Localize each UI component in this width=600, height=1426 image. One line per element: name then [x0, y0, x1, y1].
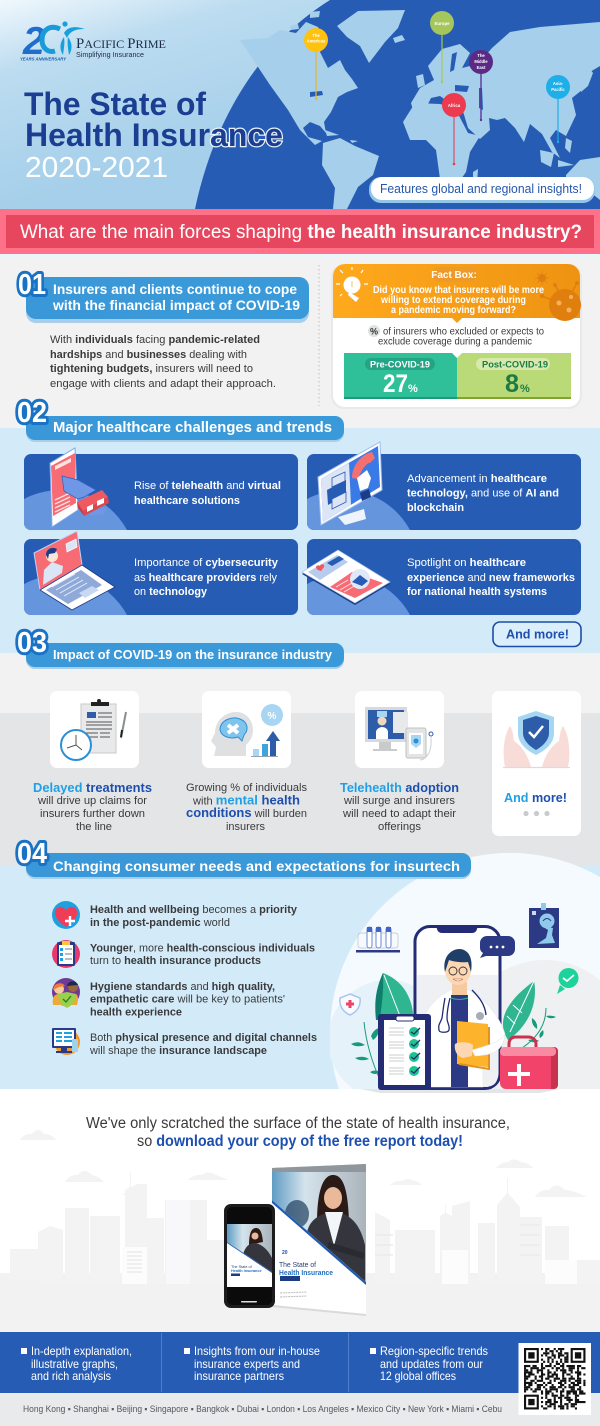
pin: The Middle East: Middle: [474, 59, 488, 64]
benefit: in-depth: In-depth explanation,: [31, 1344, 132, 1358]
benefit: in-depth: illustrative graphs,: [31, 1357, 118, 1371]
fact box: [331, 264, 582, 409]
icon: heart: [52, 901, 80, 929]
icon: head, brain and growth chart: [211, 704, 283, 756]
section 02 heading: 02: [17, 397, 47, 429]
call to action text: [86, 1115, 510, 1150]
section 01 body text: hardships and businesses dealing with: [50, 349, 247, 361]
stat: post-COVID-19 8%: [452, 353, 571, 399]
report cover: [272, 1164, 366, 1316]
list item: physical and digital: [52, 1028, 317, 1057]
left leaves: [351, 973, 413, 1080]
impact card: and more: And more!: [504, 790, 567, 805]
icon: head, brain and growth chart: %: [268, 711, 277, 722]
section 04 heading: [17, 838, 471, 879]
title: [24, 86, 283, 184]
section 03 heading: Impact of COVID-19 on the insurance industry: [53, 647, 333, 662]
check badge: [557, 968, 578, 994]
fact box: Did you know that insurers will be more: [373, 285, 544, 296]
map ocean globe: [195, 0, 600, 209]
icon: tablet: [302, 550, 390, 605]
card: telehealth: [24, 447, 298, 530]
icon: doctor on monitor with tablet: [365, 707, 433, 760]
card: healthcare technology: technology, and use of AI and: [407, 488, 559, 500]
list item: health and wellbeing: [52, 901, 298, 929]
benefit: in-depth: [21, 1344, 132, 1383]
stat: post-COVID-19 8%: %: [520, 383, 530, 395]
section 01 body text: tightening budgets, insurers will need to: [50, 363, 253, 375]
card: telehealth: Rise of telehealth and virtual: [134, 480, 281, 492]
impact card: delayed treatments: Delayed treatments: [33, 780, 152, 795]
callout: global and regional insights: [369, 177, 595, 203]
impact card: telehealth adoption: will surge and insurers: [343, 795, 456, 807]
title: The State of: [24, 86, 206, 122]
section 01 heading: [18, 269, 309, 323]
impact card: mental health: conditions will burden: [186, 805, 307, 820]
list item: hygiene standards: health experience: [90, 1006, 182, 1018]
office cities strip: Hong Kong ▪ Shanghai ▪ Beijing ▪ Singapore ▪ Bangkok ▪ Dubai ▪ London ▪ Los Angeles ▪ Mexico City ▪ New York ▪ Miami ▪ Cebu: [23, 1404, 502, 1414]
pin: The Middle East: [469, 50, 493, 121]
pin: Asia-Pacific: Asia-: [553, 81, 564, 86]
logo: Pacific Prime 20 years: Simplifying Insurance: [76, 50, 144, 59]
test tubes: [356, 927, 400, 952]
pin: Europe: Europe: [434, 21, 450, 26]
stat: post-COVID-19 8%: 8: [505, 370, 519, 398]
benefit: insights: [184, 1344, 320, 1383]
pin: Europe: [430, 11, 454, 83]
section 03 heading: 03: [17, 627, 47, 659]
fact box: %: [370, 326, 378, 336]
impact card: mental health: [186, 691, 307, 833]
benefit: regional: 12 global offices: [380, 1369, 456, 1383]
header panel: world map: [0, 0, 600, 209]
list item: hygiene standards: Hygiene standards and high quality,: [90, 981, 275, 993]
icon: phone with hand: [50, 448, 109, 527]
callout: global and regional insights: Features global and regional insights!: [380, 182, 582, 196]
impact card: delayed treatments: [33, 691, 152, 833]
phone mockup: Health Insurance: [231, 1269, 262, 1273]
impact card: telehealth adoption: [340, 691, 459, 833]
fact box: of insurers who excluded or expects to: [383, 326, 544, 338]
icon: light bulb: [336, 267, 368, 302]
report cover: The State of: [279, 1262, 316, 1269]
logo: Pacific Prime 20 years: 2: [22, 20, 45, 63]
list item: younger individuals: turn to health insurance products: [90, 955, 261, 967]
list item: younger individuals: Younger, more health-conscious individuals: [90, 942, 315, 954]
impact card: telehealth adoption: Telehealth adoption: [340, 780, 459, 795]
card: cybersecurity: on technology: [134, 586, 208, 598]
pin: The Americas: The: [312, 33, 320, 38]
section 04 heading: Changing consumer needs and expectations for insurtech: [53, 858, 460, 874]
card: healthcare technology: blockchain: [407, 502, 464, 514]
stat: pre-COVID-19 27%: 27: [383, 370, 408, 398]
icon: laptop: [34, 531, 115, 610]
x-ray card: [529, 903, 559, 948]
pin: Asia-Pacific: [546, 75, 570, 143]
shield badge: [340, 994, 360, 1015]
icon: shield and hands: [503, 711, 570, 768]
report cover: Health Insurance: [279, 1270, 333, 1277]
list item: hygiene standards: empathetic care will be key to patients': [90, 994, 285, 1006]
logo: Pacific Prime 20 years: YEARS ANNIVERSARY: [20, 56, 67, 62]
pin: The Americas: [304, 28, 328, 100]
right leaves: [503, 981, 556, 1048]
card: cybersecurity: Importance of cybersecurity: [134, 557, 279, 569]
section 02 heading: [17, 397, 344, 442]
impact card: and more: [492, 691, 581, 836]
skyline background: [0, 1130, 600, 1332]
impact card: delayed treatments: the line: [76, 821, 112, 833]
phone mockup: The State of: [231, 1265, 253, 1269]
benefit: regional: [370, 1344, 488, 1383]
icon: clipboard and clock: [61, 699, 126, 760]
call to action text: so download your copy of the free report today!: [137, 1133, 463, 1150]
report cover: 20: [282, 1250, 288, 1256]
stat: pre-COVID-19 27%: [344, 353, 457, 399]
banner: main question: What are the main forces shaping the health insurance industry?: [20, 222, 582, 243]
speech bubble: [480, 936, 515, 958]
icon: virus: [535, 271, 581, 321]
section 01 body text: engage with clients and adapt their approach.: [50, 378, 276, 390]
section 01: [18, 264, 582, 409]
impact card: telehealth adoption: will need to adapt their: [342, 808, 456, 820]
title: Health Insurance: [25, 117, 283, 153]
pin: Asia-Pacific: Pacific: [551, 87, 565, 92]
list item: health and wellbeing: Health and wellbeing becomes a priority: [90, 904, 298, 916]
benefits band: [0, 1332, 600, 1393]
card: healthcare experience: for national health systems: [407, 586, 547, 598]
pin: Africa: Africa: [448, 103, 461, 108]
first aid kit: [500, 1037, 558, 1089]
logo: Pacific Prime 20 years: [20, 20, 166, 63]
stat: post-COVID-19 8%: Post-COVID-19: [482, 360, 548, 370]
button: And more!: And more!: [506, 626, 569, 642]
doctor: [421, 949, 505, 1087]
impact card: mental health: insurers: [226, 821, 265, 833]
card: cybersecurity: as healthcare providers rely: [134, 572, 277, 584]
fact box: willing to extend coverage during: [380, 295, 526, 306]
fact box: Fact Box:: [431, 270, 477, 281]
benefit: insights: insurance partners: [194, 1369, 284, 1383]
impact card: telehealth adoption: offerings: [378, 821, 422, 833]
card: healthcare experience: [302, 539, 581, 615]
card: cybersecurity: [24, 530, 298, 615]
stat: pre-COVID-19 27%: Pre-COVID-19: [370, 360, 430, 370]
section 01 heading: 01: [18, 269, 46, 301]
pin: The Middle East: The: [477, 53, 485, 58]
pin: The Americas: Americas: [307, 38, 326, 44]
list item: health and wellbeing: in the post-pandemic world: [90, 917, 230, 929]
office cities strip: [0, 1393, 600, 1426]
pin: The Middle East: East: [477, 65, 486, 70]
map continents: [240, 10, 600, 209]
clipboard with checks: [378, 1014, 431, 1090]
map inland seas: [310, 52, 483, 110]
benefit: insights: insurance experts and: [194, 1357, 300, 1371]
section 04 illustration: doctor on phone: [330, 853, 600, 1093]
section 01 body text: With individuals facing pandemic-related: [50, 334, 260, 346]
button: And more!: [493, 622, 581, 646]
card: healthcare technology: [307, 441, 581, 530]
card: healthcare technology: Advancement in healthcare: [407, 473, 547, 485]
fact box: exclude coverage during a pandemic: [378, 336, 532, 348]
fact box: a pandemic moving forward?: [391, 305, 516, 316]
logo: Pacific Prime 20 years: PACIFIC PRIME: [76, 36, 166, 52]
phone mockup: [224, 1204, 275, 1308]
card: healthcare experience: experience and new frameworks: [407, 572, 575, 584]
icon: monitor with doctor: [318, 442, 382, 525]
section 03 heading: [17, 627, 344, 669]
section 02 heading: Major healthcare challenges and trends: [53, 419, 332, 436]
pin: Africa: [442, 93, 466, 165]
card: healthcare experience: Spotlight on healthcare: [407, 557, 526, 569]
list item: physical and digital: will shape the insurance landscape: [89, 1045, 267, 1057]
phone frame: [415, 926, 500, 1088]
impact card: delayed treatments: will drive up claims for: [37, 795, 147, 807]
section 04 heading: 04: [17, 838, 47, 870]
section 03 heading: 03: [17, 627, 47, 659]
icon: kiosk screen: [52, 1028, 80, 1055]
section 04 heading: 04: [17, 838, 47, 870]
section 01 heading: Insurers and clients continue to cope: [53, 281, 297, 297]
benefit: in-depth: and rich analysis: [31, 1369, 111, 1383]
benefit: regional: and updates from our: [380, 1357, 483, 1371]
section 01 heading: with the financial impact of COVID-19: [52, 297, 300, 313]
list item: hygiene standards: [52, 978, 285, 1018]
section 01 body text: [50, 334, 276, 390]
icon: people with shield: [52, 978, 80, 1008]
benefit: regional: Region-specific trends: [380, 1344, 488, 1358]
section 01 heading: 01: [18, 269, 46, 301]
impact card: delayed treatments: insurers further down: [40, 808, 145, 820]
list item: younger individuals: [52, 940, 315, 968]
list item: physical and digital: Both physical presence and digital channels: [90, 1032, 317, 1044]
QR code: [518, 1343, 591, 1415]
banner: main question: [0, 209, 600, 254]
benefit: insights: Insights from our in-house: [194, 1344, 320, 1358]
impact card: mental health: with mental health: [192, 792, 300, 808]
impact card: mental health: Growing % of individuals: [186, 782, 307, 794]
stat: pre-COVID-19 27%: %: [408, 383, 418, 395]
icon: checklist: [52, 940, 80, 968]
card: telehealth: healthcare solutions: [134, 495, 240, 507]
title: 2020-2021: [25, 152, 168, 184]
section 02 heading: 02: [17, 397, 47, 429]
call to action text: We've only scratched the surface of the state of health insurance,: [86, 1115, 510, 1132]
